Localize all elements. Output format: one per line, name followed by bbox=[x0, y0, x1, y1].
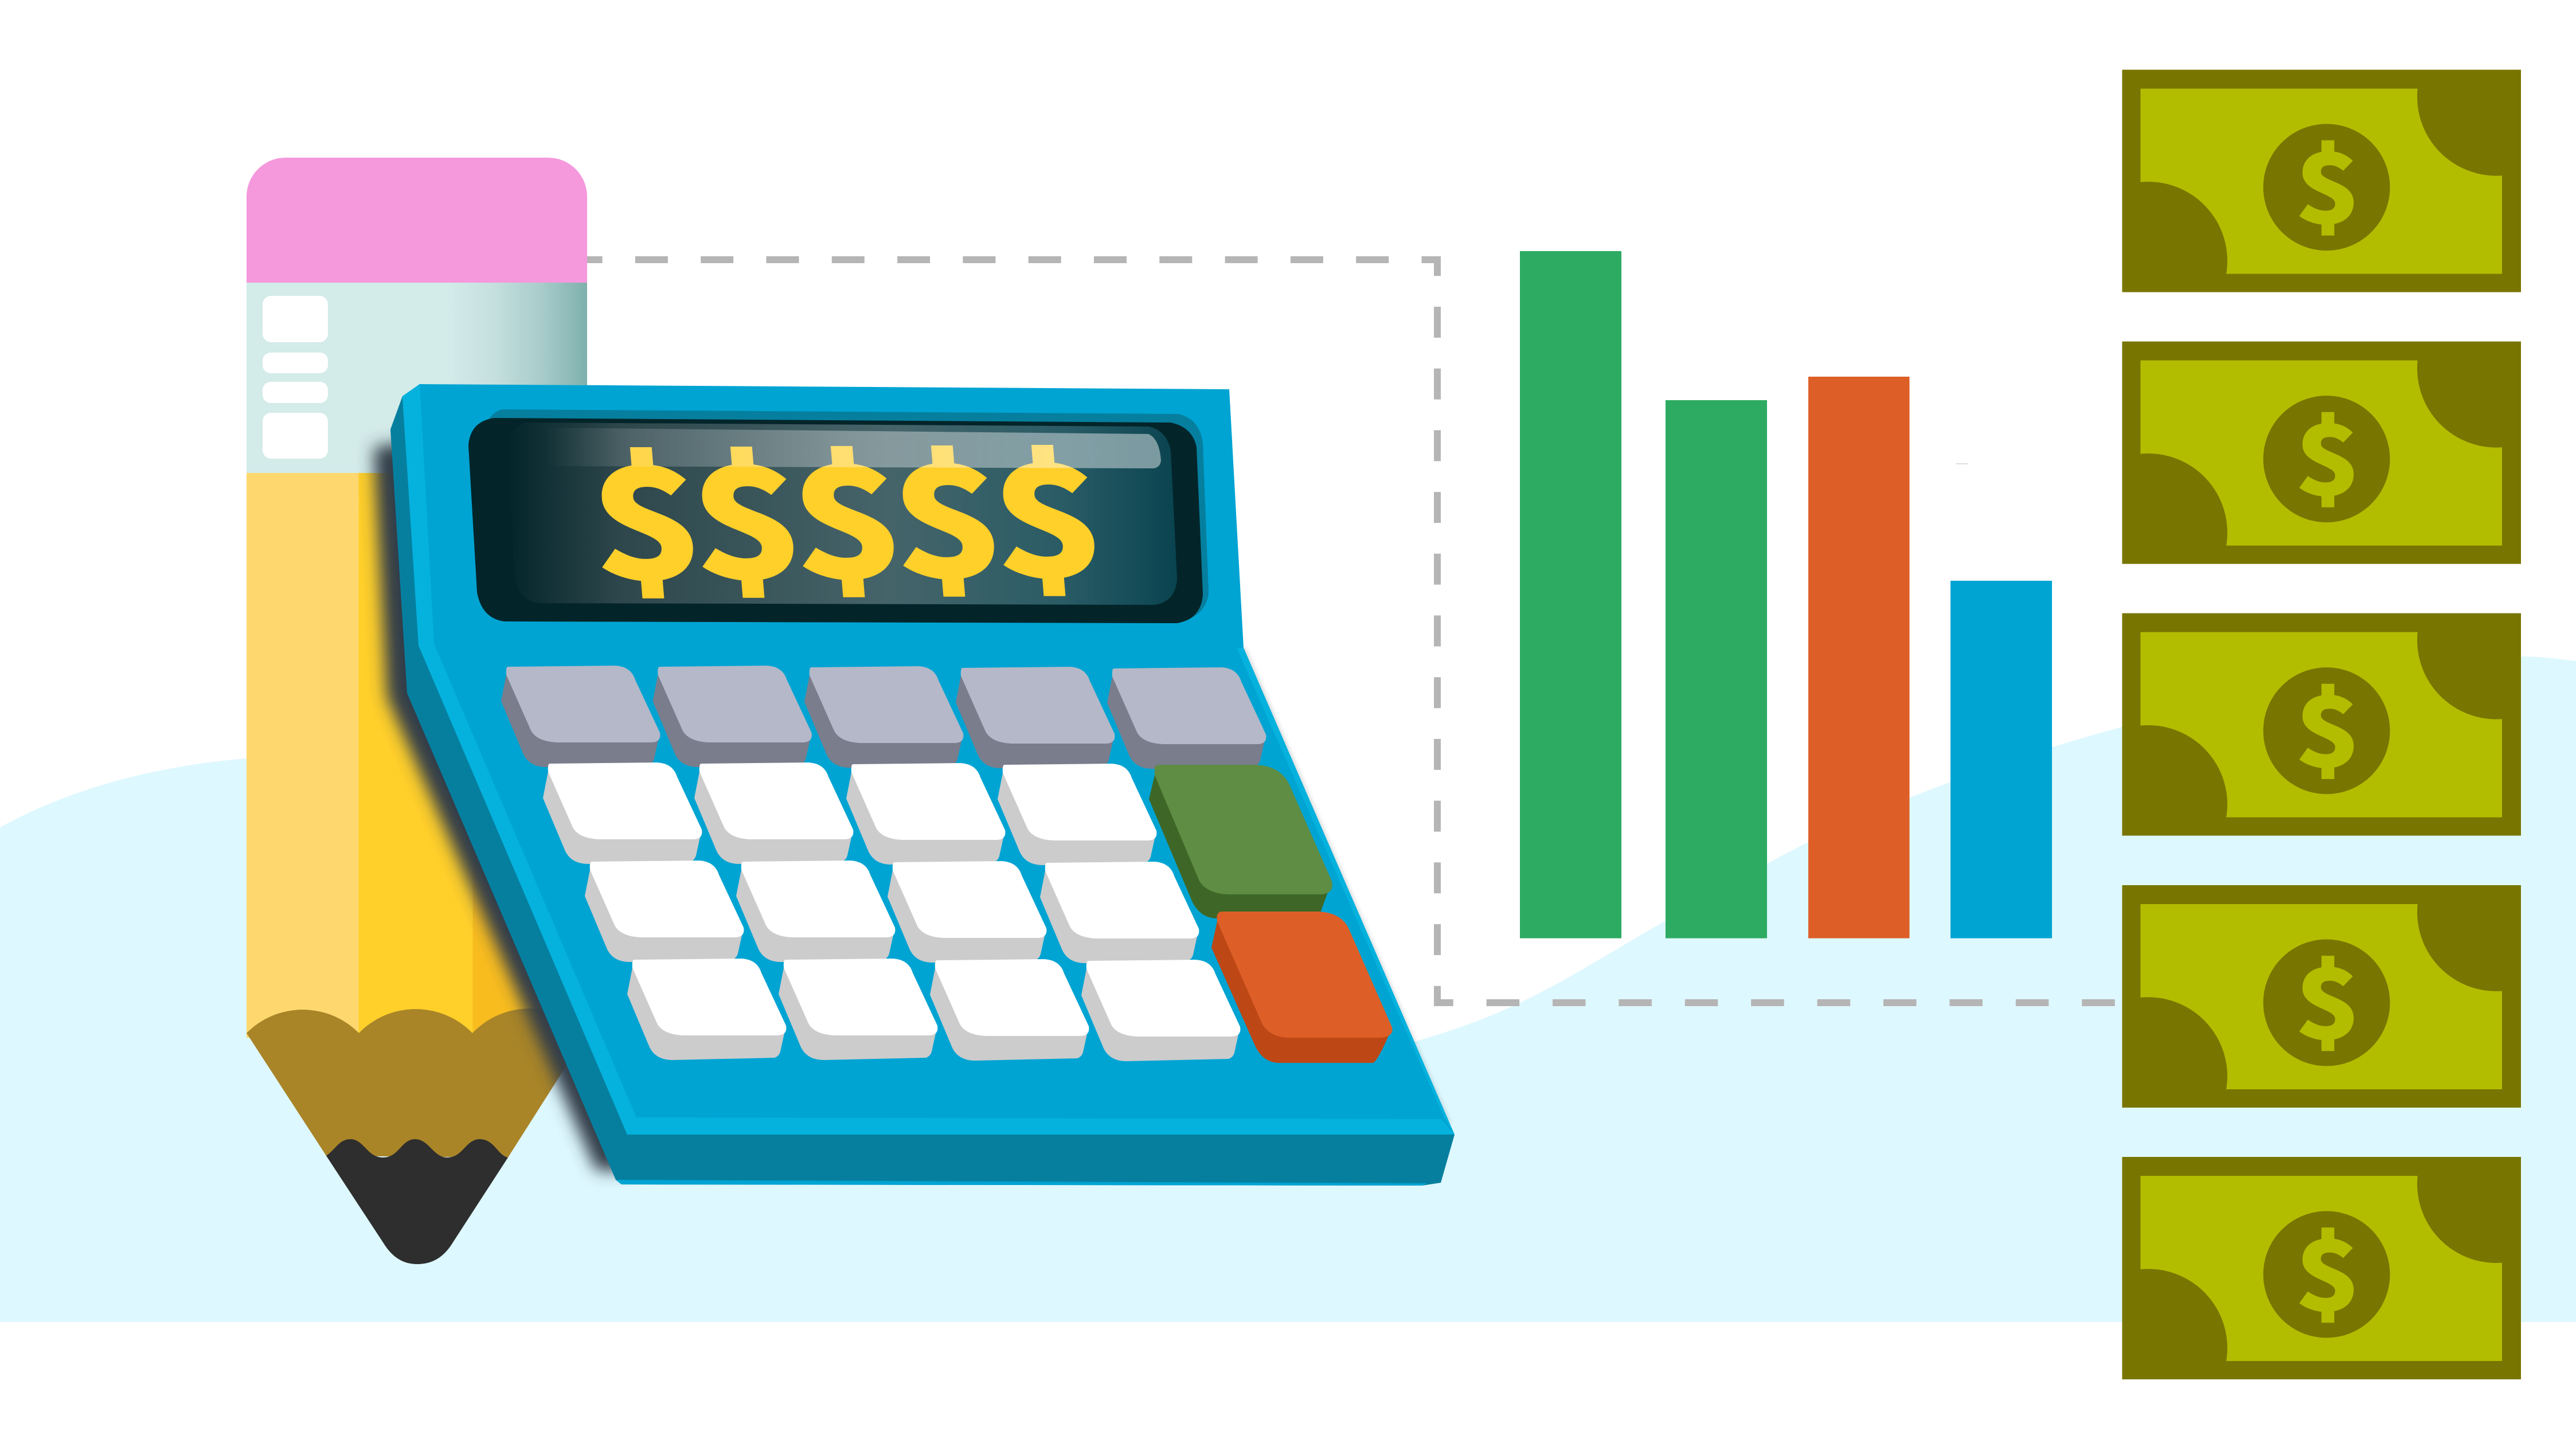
display digits: $ bbox=[781, 399, 913, 623]
calculator shadow bbox=[374, 441, 625, 1171]
display digits bbox=[581, 398, 1113, 624]
orange key bbox=[1211, 912, 1393, 1063]
pencil wood bbox=[247, 1008, 587, 1157]
pencil lead bbox=[326, 1139, 508, 1264]
calculator bevel bbox=[402, 384, 1455, 1135]
bar chart bbox=[1520, 251, 2052, 938]
banknote 2: $ bbox=[2294, 382, 2361, 523]
green key bbox=[1149, 765, 1332, 918]
calculator display bbox=[468, 398, 1209, 624]
display gloss bbox=[527, 428, 1161, 468]
pencil ferrule bbox=[247, 283, 587, 473]
display digits: $ bbox=[882, 398, 1013, 623]
pencil eraser bbox=[247, 158, 587, 283]
display digits: $ bbox=[581, 400, 712, 624]
background wave bbox=[0, 656, 2576, 1322]
banknote 5: $ bbox=[2294, 1198, 2361, 1339]
banknote 1 bbox=[2122, 70, 2521, 292]
banknote 3 bbox=[2122, 613, 2521, 836]
banknote 3: $ bbox=[2294, 654, 2361, 795]
dashed connector bbox=[570, 256, 2115, 1006]
banknote 2 bbox=[2122, 342, 2521, 564]
display digits: $ bbox=[681, 400, 812, 624]
calculator face bbox=[402, 384, 1455, 1135]
calculator bbox=[390, 384, 1455, 1186]
banknote 5 bbox=[2122, 1157, 2521, 1379]
pencil body bbox=[247, 473, 587, 1038]
function keys row bbox=[501, 666, 1266, 769]
calculator side bbox=[390, 396, 1455, 1186]
banknote 4 bbox=[2122, 885, 2521, 1108]
display digits: $ bbox=[982, 398, 1113, 622]
pencil bbox=[247, 158, 587, 1264]
banknote 1: $ bbox=[2294, 111, 2361, 252]
number keys bbox=[543, 762, 1240, 1061]
banknote 4: $ bbox=[2294, 926, 2361, 1067]
